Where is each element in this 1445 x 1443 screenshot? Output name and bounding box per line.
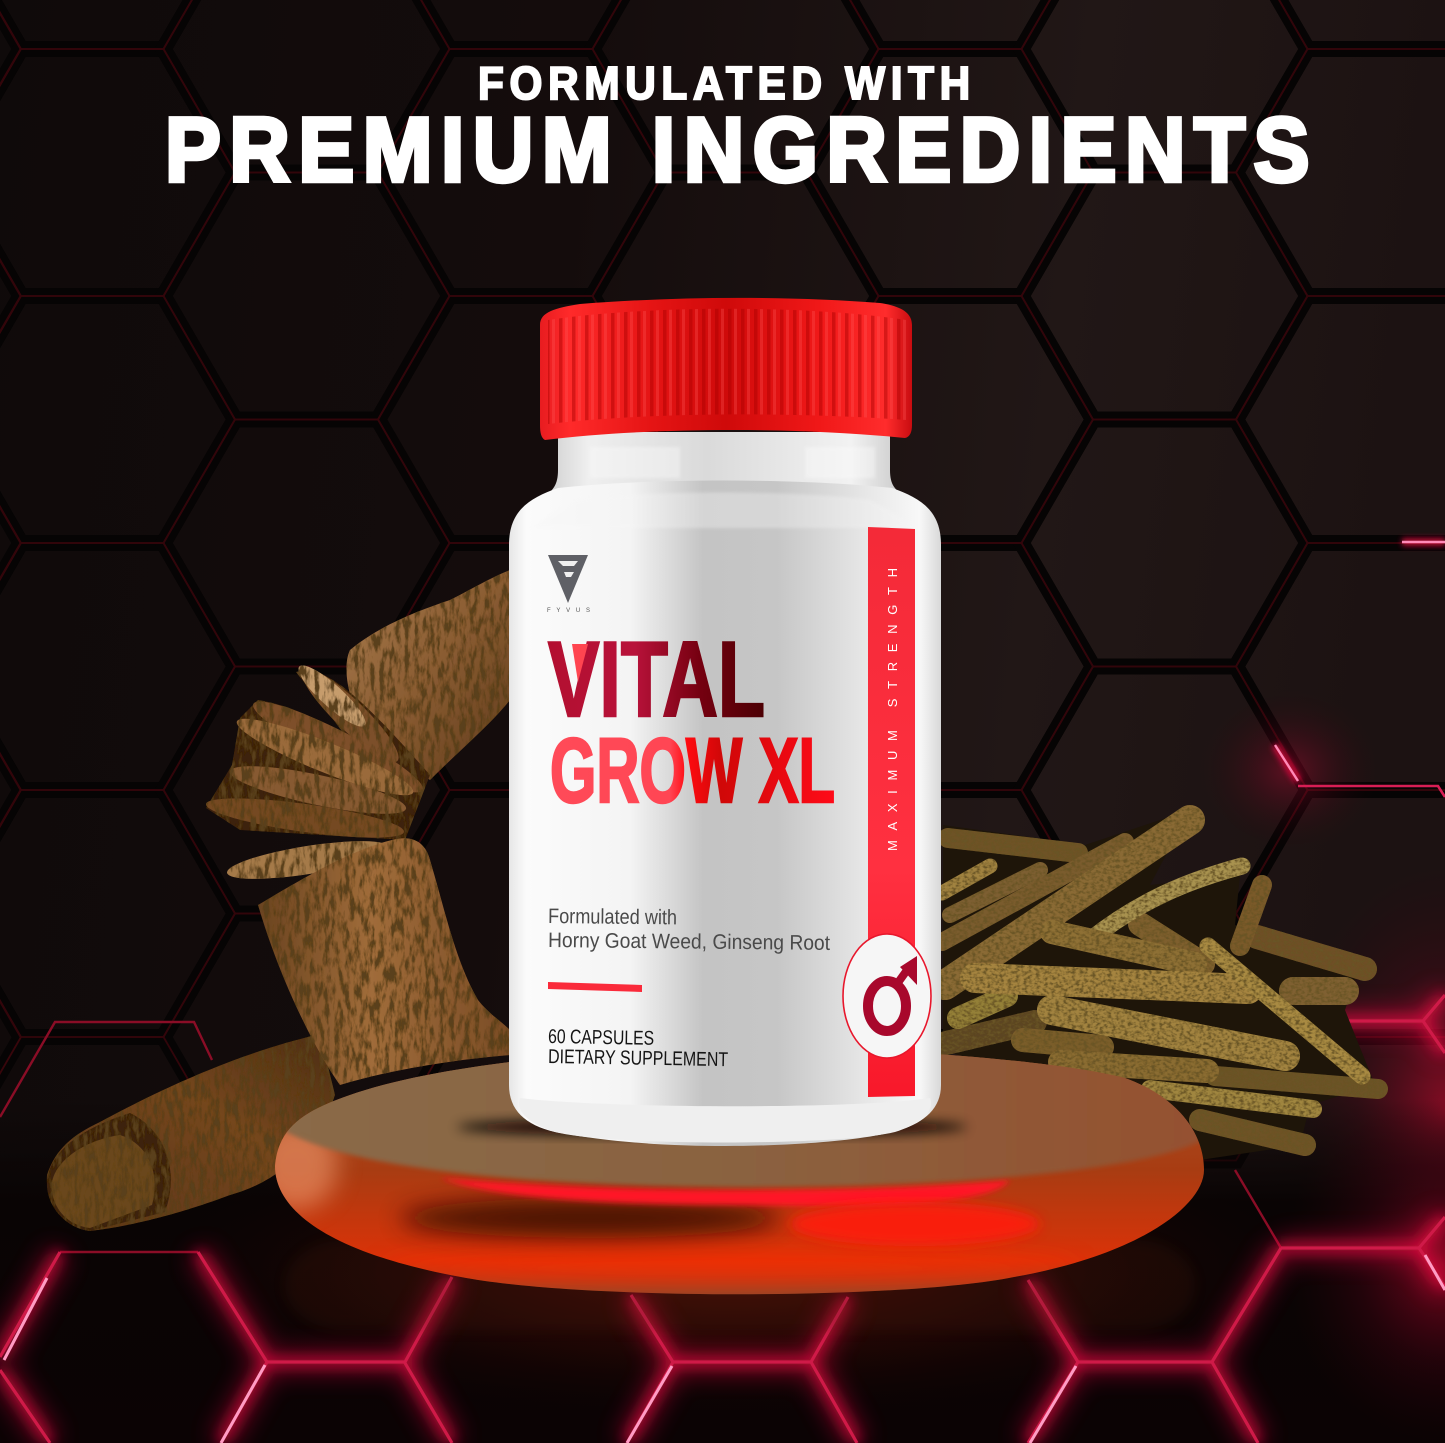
podium reflection [285,1240,1195,1330]
bottle neck [545,432,905,496]
right edge floor glow [1285,1083,1445,1443]
sticks [942,820,1378,1145]
root: bottom left log [47,1034,335,1231]
capsule count text: 60 CAPSULES [548,1026,654,1050]
capsule count text: DIETARY SUPPLEMENT [548,1046,728,1071]
red divider [548,982,642,992]
neck highlights [590,447,875,478]
icon: right ginseng root sticks [942,810,1378,1160]
title line 1: FORMULATED WITH [478,58,970,109]
capsule count text [548,1026,728,1071]
bottle bottom band [519,1098,931,1142]
stick pile shadow backing [943,810,1375,1160]
title line 2: PREMIUM INGREDIENTS [165,99,1309,201]
root: central trunk [258,838,510,1085]
bottle shoulder highlight [530,492,915,528]
dim upper floor lines [0,1022,1281,1252]
red vertical stripe [868,527,915,1097]
title [165,58,1309,201]
bottle cap [540,298,912,440]
brand logo [547,555,590,614]
product name: GROW XL: GROW XL [550,720,835,822]
root: sliced discs [204,658,430,887]
ingredients text [548,905,830,955]
product name: VITAL: VITAL [548,619,765,739]
ingredients text: Formulated with [548,905,677,929]
ingredients text: Horny Goat Weed, Ginseng Root [548,929,830,955]
bottle contact shadow [457,1118,967,1136]
right side glow on wall [1200,690,1445,1360]
icon: left cassava roots [47,570,510,1231]
brand logo: FYVUS [547,608,590,614]
bottle body [509,480,941,1146]
floor with neon hexagon lines [0,542,1445,1443]
root: upper stump [346,570,510,780]
podium [254,1040,1210,1330]
podium body [275,1054,1204,1294]
podium top face [286,1054,1199,1190]
vertical label: maximum strength: MAXIMUM STRENGTH [885,568,900,851]
product bottle [509,298,941,1146]
icon: male symbol badge [843,934,931,1058]
